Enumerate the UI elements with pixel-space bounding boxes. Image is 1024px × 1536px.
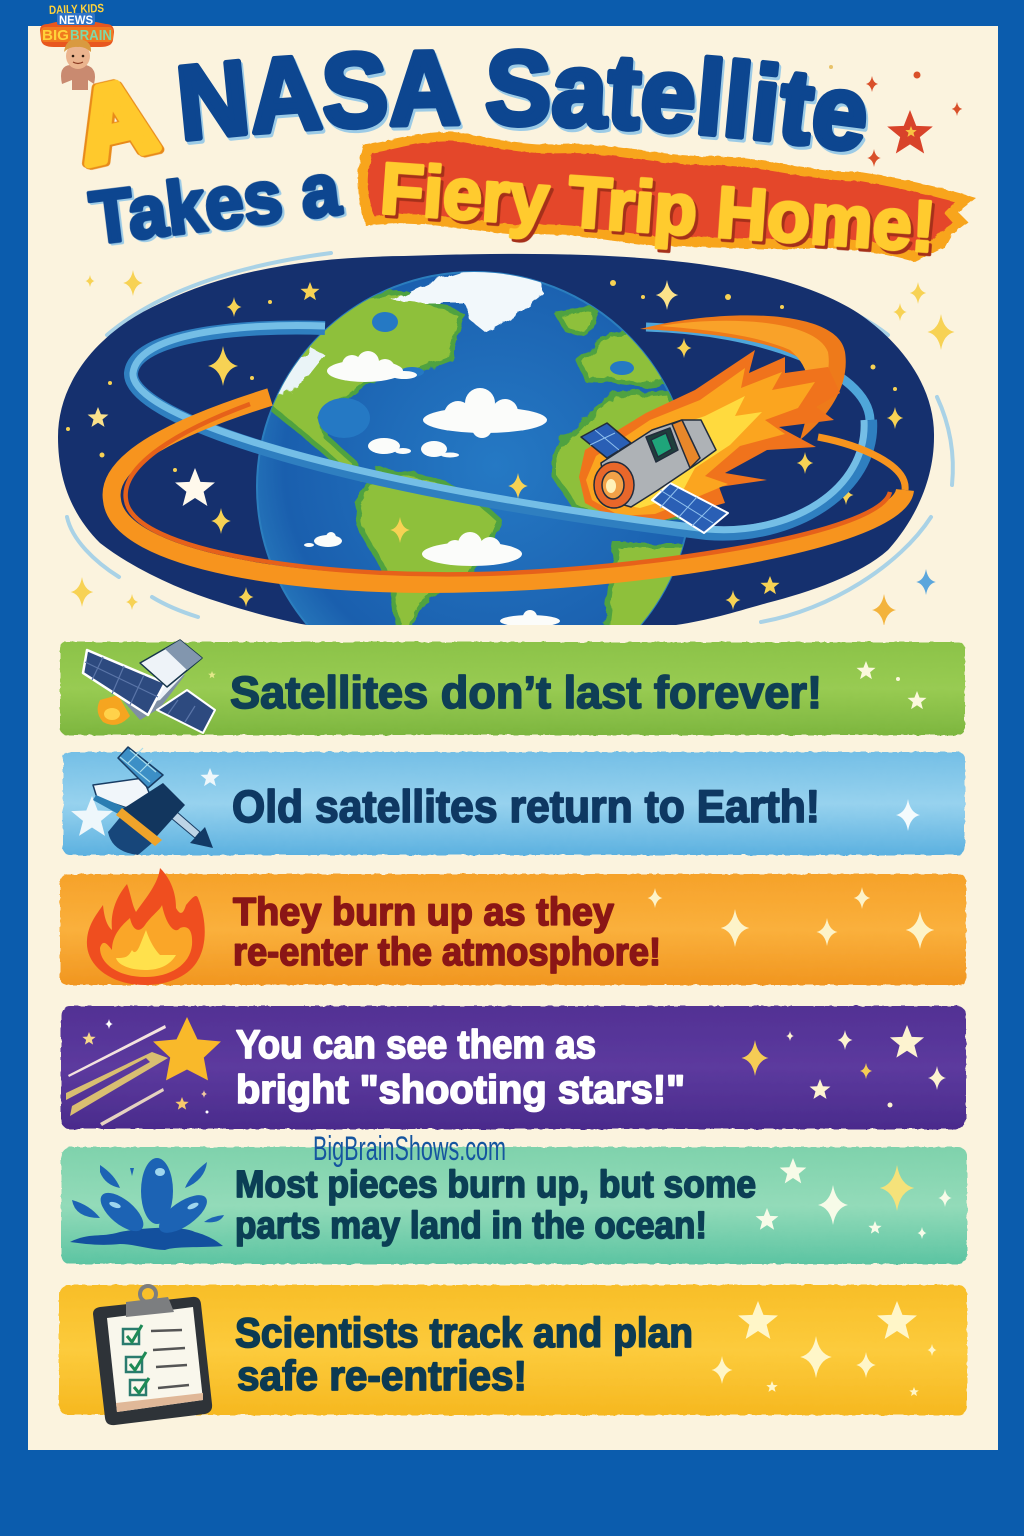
- flame banner: [358, 132, 976, 262]
- back of blue orbit: [646, 327, 870, 420]
- title letter A: A: [65, 57, 165, 187]
- flame tail: [579, 315, 846, 523]
- banner sparkles: [742, 1025, 946, 1108]
- icon: shooting star: [66, 1017, 221, 1126]
- banner text: [236, 1023, 685, 1112]
- banner text: [233, 891, 661, 974]
- satellite: [581, 420, 728, 533]
- banner sparkles: [208, 661, 926, 709]
- solar panels: [581, 423, 631, 458]
- title: Takes a: Takes a: [86, 147, 345, 260]
- banner sparkle: [896, 799, 920, 831]
- banner 1: Satellites don't last forever!: [60, 640, 965, 735]
- banner text: [235, 1164, 756, 1247]
- logo character: [61, 39, 95, 90]
- banner text: bright "shooting stars!": [236, 1068, 685, 1112]
- icon: satellite: [83, 640, 215, 733]
- banner text: Old satellites return to Earth!: [232, 781, 820, 832]
- polar ice: [391, 268, 543, 332]
- banner 2: Old satellites return to Earth!: [63, 747, 965, 855]
- logo: Daily Kids News with Big Brain: NEWS: [59, 13, 93, 27]
- title decorative stars: [829, 65, 962, 167]
- motion swooshes: [67, 253, 953, 622]
- banner 3: They burn up: [60, 868, 966, 985]
- continents: [265, 292, 700, 630]
- banner text: Scientists track and plan: [235, 1309, 693, 1356]
- banner text: You can see them as: [236, 1023, 596, 1067]
- cover at bottom of illustration: [60, 625, 940, 639]
- banner text: [235, 1309, 693, 1399]
- lakes and ocean inlets: [318, 312, 634, 438]
- orange orbit front: [112, 397, 905, 584]
- stars in space: [66, 270, 954, 626]
- banner text: Satellites don’t last forever!: [230, 667, 822, 718]
- banner sparkles: [756, 1158, 952, 1239]
- banner text: They burn up as they: [233, 891, 614, 934]
- banner text: safe re-entries!: [237, 1352, 527, 1399]
- icon: flame: [87, 868, 205, 985]
- banner 5: Most pieces burn up: [61, 1147, 967, 1264]
- banner 6: Scientists track: [59, 1285, 967, 1425]
- banner 4: shooting stars: [61, 1006, 966, 1129]
- banner text: re-enter the atmosphore!: [233, 931, 661, 974]
- illustration: satellite re-entry over Earth: [58, 251, 955, 625]
- checklist: [123, 1325, 189, 1395]
- blue orbit front: [131, 326, 870, 534]
- watermark: BigBrainShows.com: BigBrainShows.com: [313, 1130, 506, 1168]
- nozzle: [594, 462, 634, 508]
- banner sparkles: [648, 887, 934, 949]
- satellite body: [601, 420, 716, 507]
- title line: NASA Satellite: [181, 124, 874, 153]
- icon: falling satellite: [71, 747, 219, 855]
- logo: Daily Kids News with Big Brain: BRAIN: [70, 27, 112, 44]
- logo: Daily Kids News with Big Brain: DAILY KIDS: [49, 1, 104, 17]
- title: [65, 48, 976, 268]
- icon: water splash: [70, 1158, 224, 1250]
- icon: clipboard: [93, 1286, 212, 1425]
- logo: Daily Kids News with Big Brain: BIG: [42, 27, 69, 44]
- banner text: parts may land in the ocean!: [235, 1205, 707, 1247]
- flame banner text: Fiery Trip Home!: [378, 149, 938, 268]
- logo: Daily Kids News with Big Brain: [40, 1, 114, 90]
- Earth globe: [256, 271, 686, 625]
- clouds: [304, 351, 560, 627]
- space blob: [58, 254, 934, 625]
- banner sparkles: [712, 1301, 936, 1396]
- banner text: Most pieces burn up, but some: [235, 1164, 756, 1206]
- title: NASA Satellite: [178, 48, 868, 155]
